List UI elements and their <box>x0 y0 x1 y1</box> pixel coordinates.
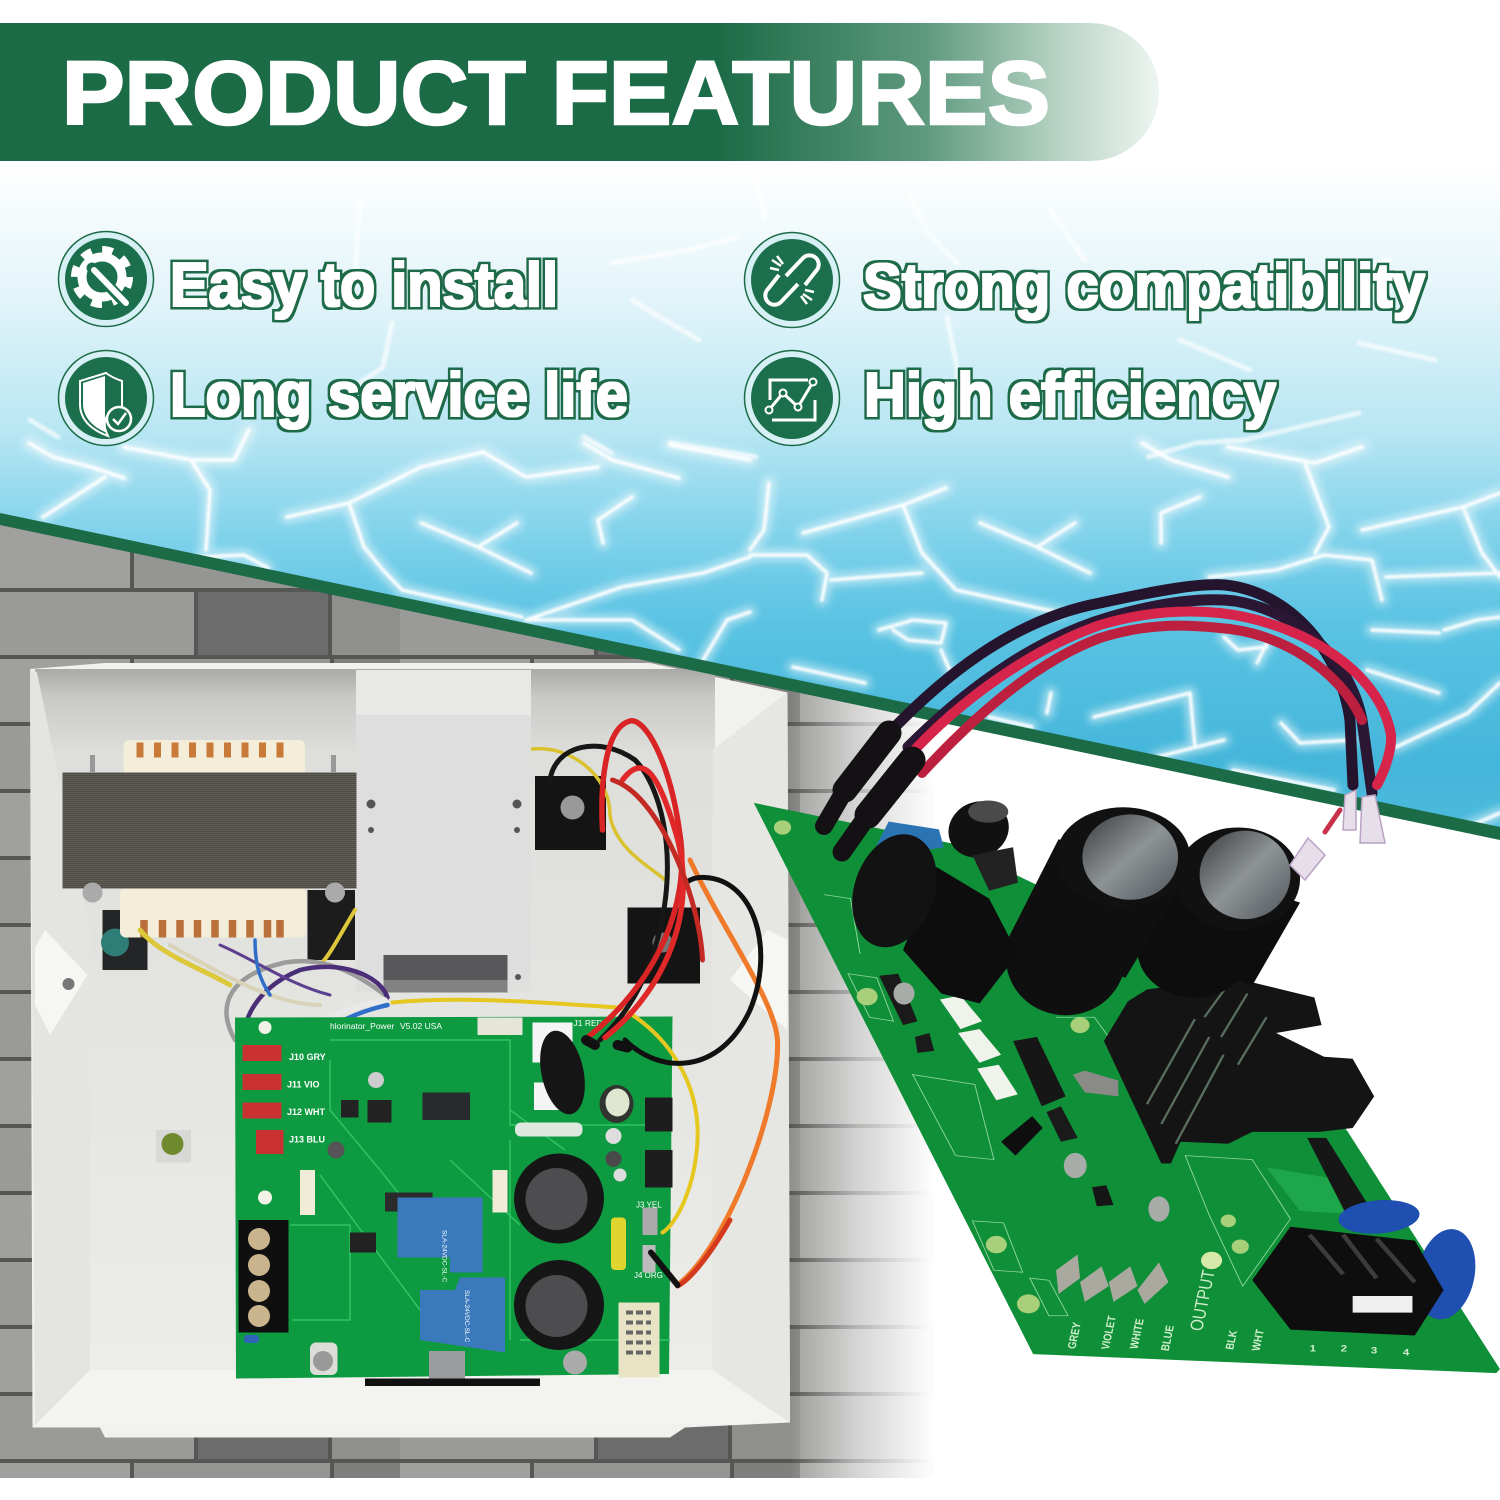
icon: shield with check <box>58 350 154 446</box>
circuit board: J12 WHT <box>287 1107 326 1117</box>
relays <box>398 1198 505 1352</box>
icon: gear and wrench <box>58 232 154 326</box>
label: Easy to install <box>170 251 558 320</box>
circuit board: J3 YEL <box>636 1200 662 1210</box>
upper faint caustics <box>30 180 1435 457</box>
board silkscreen labels: GREY <box>1066 1322 1084 1350</box>
black relays <box>1104 978 1374 1164</box>
label: High efficiency <box>864 361 1276 430</box>
terminal block <box>238 1220 288 1343</box>
brick wall backdrop <box>0 510 1000 1500</box>
relays: SLA-24VDC-SL-C <box>440 1230 448 1283</box>
circuit board: J11 VIO <box>287 1080 320 1090</box>
label: Strong compatibility <box>863 252 1425 321</box>
feature: easy to install <box>58 232 558 326</box>
optocouplers <box>940 995 1018 1100</box>
board silkscreen labels: 3 <box>1371 1345 1377 1356</box>
board silkscreen labels: BLK <box>1223 1329 1240 1351</box>
terminals <box>535 776 700 984</box>
loose circuit board photo <box>754 795 1500 1373</box>
circuit board: J10 GRY <box>289 1052 326 1062</box>
feature: high efficiency <box>744 350 1276 446</box>
header banner <box>0 23 1159 161</box>
varistor discs <box>1336 1197 1482 1323</box>
title: PRODUCT FEATURES <box>62 44 1050 144</box>
circuit board: hlorinator_Power <box>330 1021 394 1031</box>
board silkscreen labels: WHITE <box>1128 1318 1147 1350</box>
transformer <box>62 740 356 970</box>
circuit board: V5.02 USA <box>400 1021 442 1031</box>
pool water background <box>0 0 1500 830</box>
icon: line chart <box>744 350 840 446</box>
small capacitors <box>893 982 1169 1222</box>
circuit board: J13 BLU <box>289 1134 325 1144</box>
capacitors <box>514 1154 604 1350</box>
board silkscreen labels: WHT <box>1250 1328 1267 1352</box>
board silkscreen labels <box>1066 1268 1409 1358</box>
bracket <box>356 670 531 994</box>
box wiring <box>392 721 778 1286</box>
circuit board: J1 RED <box>574 1018 603 1028</box>
caustics glow <box>29 430 1500 827</box>
board silkscreen labels: OUTPUT <box>1186 1268 1219 1332</box>
board silkscreen labels: 1 <box>1310 1343 1316 1354</box>
feature: strong compatibility <box>744 232 1425 328</box>
heat shrink joints <box>824 733 912 852</box>
pcb <box>754 803 1500 1373</box>
board hardware <box>310 1302 660 1386</box>
wire connectors <box>1290 790 1385 880</box>
diagonal divider band <box>0 513 1500 840</box>
transformer leads <box>140 910 388 1145</box>
output terminal block <box>1252 1227 1444 1336</box>
upper wires <box>889 585 1391 832</box>
icon: broken link <box>744 232 840 328</box>
control box photo <box>30 663 790 1438</box>
large capacitors <box>1006 807 1300 1015</box>
board silkscreen labels: 2 <box>1341 1343 1347 1354</box>
label: Long service life <box>170 361 628 430</box>
circuit board: J4 ORG <box>634 1271 663 1280</box>
ics <box>879 974 1367 1213</box>
board silkscreen labels: VIOLET <box>1099 1315 1119 1351</box>
caustics core <box>29 430 1500 827</box>
board silkscreen labels: 4 <box>1403 1347 1409 1358</box>
spade terminals <box>1056 1254 1169 1304</box>
enclosure shell <box>30 663 790 1438</box>
small black parts <box>840 795 1018 1003</box>
board silkscreen labels: BLUE <box>1159 1325 1177 1352</box>
circuit board <box>235 1016 672 1378</box>
feature: long service life <box>58 350 628 446</box>
ground screw <box>156 1130 191 1162</box>
relays: SLA-24VDC-SL-C <box>463 1290 470 1343</box>
